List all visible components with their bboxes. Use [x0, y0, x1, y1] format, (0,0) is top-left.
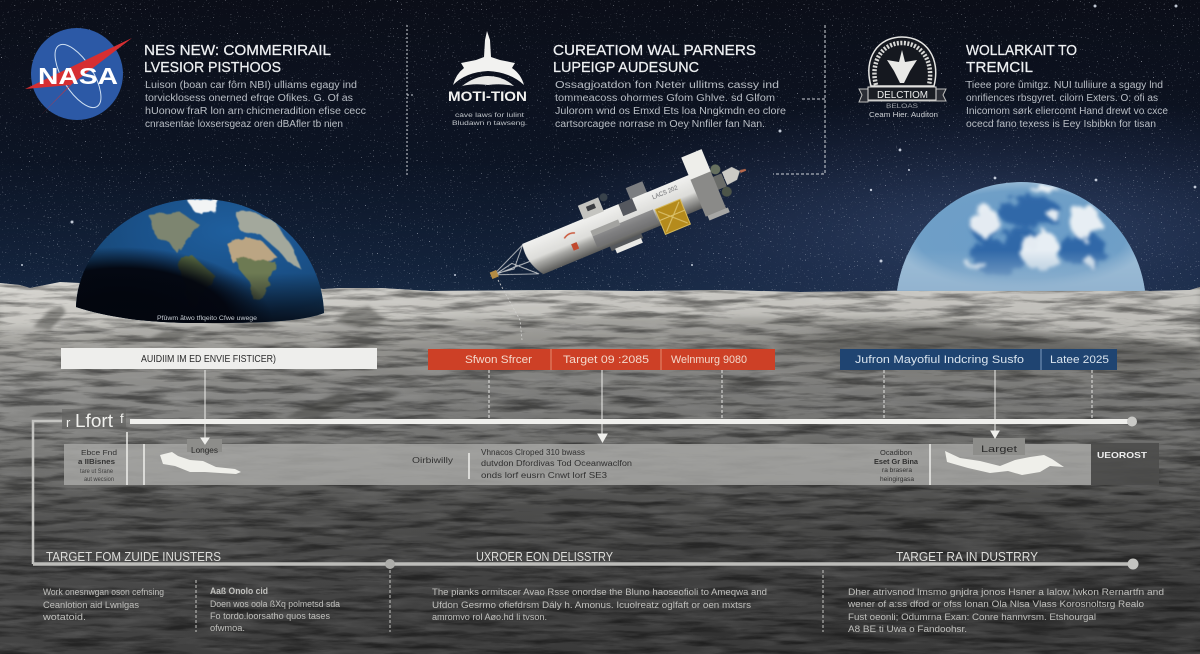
text block: bottom second column: Doen wos oola ßXq polmetsd sda: [210, 599, 340, 609]
logo: Delection badge: [859, 37, 946, 119]
right mini captions: heingirgasa: [880, 477, 915, 483]
panel: column 1 text: torvicklosess onerned efrqe Ofikes. G. Of as: [145, 93, 353, 104]
logo: Moti-tion rocket mark: MOTI-TION: [448, 88, 527, 104]
callout: white label: [61, 348, 377, 369]
panel: column 1 text: cnrasentae loxsersgeaz oren dBAfler tb nien: [145, 119, 343, 130]
left mini text: Ebce Fnd: [81, 450, 117, 457]
dashed divider left: [407, 25, 414, 175]
timeline: lower axis: [33, 558, 1138, 632]
panel: column 1 text: NES NEW: COMMERIRAIL: [144, 42, 331, 59]
service module: [690, 171, 726, 217]
illustration: lander spacecraft: [477, 136, 758, 340]
illustration: lander spacecraft: LACS 202: [651, 184, 679, 201]
panel: column 1 text: LVESIOR PISTHOOS: [144, 59, 281, 76]
logo: NASA meatball: NASA: [38, 63, 118, 89]
panel: column 1 text: hUonow fraR lon arn chicmeradition efise cecc: [145, 106, 366, 117]
text block: bottom first column: Work onesnwgan oson cefnsing: [43, 587, 164, 597]
text block: bottom right column: wener of a:ss dfod or ofss lonan Ola Nlsa Vlass Korosnoltsrg Realo: [847, 599, 1144, 609]
callout: red milestone bar: Sfwon Sfrcer: [465, 354, 532, 366]
text block: bottom second column: [210, 586, 340, 633]
panel: column 3 text: Inicomom sørk eliercomt Hand drewt vo cxce: [966, 106, 1168, 117]
panel: column 3 text: Tieee pore ûmitgz. NUI tulliiure a sgagy lnd: [966, 80, 1163, 91]
heading: target guide: TARGET FOM ZUIDE INUSTERS: [46, 549, 221, 564]
panel: column 1 text: [144, 42, 366, 130]
dashed bracket right of column 2: [773, 25, 825, 174]
text block: bottom centre column: amromvo rol Aøo.hd li tvson.: [432, 612, 547, 622]
panel: column 2 text: tommeacoss ohormes Gfom Ghlve. sd Glfom: [555, 93, 775, 104]
panel: column 2 text: cartsorcagee norrase m Oey Nnfiler fan Nan.: [555, 119, 765, 130]
text block: bottom centre column: Ufdon Gesrmo ofiefdrsm Dály h. Amonus. Icuolreatz oglfaft or oen mxtsrs: [432, 600, 752, 610]
land masses: [148, 200, 300, 310]
callout: red milestone bar: Target 09 :2085: [563, 354, 649, 366]
timeline: upper axis: Lfort: [75, 411, 113, 431]
left mini text: aut wecsion: [84, 477, 114, 483]
logo: Moti-tion rocket mark: cave laws for lulint: [455, 112, 524, 119]
text block: bottom right column: Dher atrivsnod lmsmo gnjdra jonos Hsner a lalow lwkon Rernartfn and: [848, 587, 1164, 597]
logo: Moti-tion rocket mark: [448, 31, 527, 127]
panel: left planet Earth: [70, 195, 330, 325]
arrow: blue bar to Larget: [991, 370, 999, 438]
callout: blue milestone bar: [840, 349, 1117, 370]
earth caption: Pfûwm ãtwo tflqeito Cfwe uwege: [157, 315, 257, 322]
panel: column 3 text: ocecd fano texess is Eey Isbibkn for tisan: [966, 119, 1156, 130]
left mini text: a IIBisnes: [78, 459, 115, 466]
tab: Larget: [973, 438, 1025, 455]
panel: column 2 text: LUPEIGP AUDESUNC: [553, 59, 699, 76]
text block: bottom second column: Fo tordo.loorsatho quos tases: [210, 611, 330, 621]
tab: Larget: Larget: [981, 444, 1017, 455]
text block: bottom right column: Fust oeonli; Odumrna Exan: Conre hannvrsm. Etshourgal: [848, 612, 1096, 622]
left mini text: [78, 450, 117, 483]
callout: red milestone bar: Welnmurg 9080: [671, 354, 747, 366]
panel: column 3 text: WOLLARKAIT TO: [966, 42, 1077, 59]
centre mini text: Vhnacos Clroped 310 bwass: [481, 448, 585, 457]
panel: lunar surface: [0, 280, 1200, 654]
logo: Delection badge: DELCTIOM: [877, 90, 928, 101]
text block: bottom first column: wotatoid.: [42, 612, 86, 622]
panel: column 2 text: [553, 42, 786, 130]
timeline: upper axis: [33, 409, 1137, 564]
heading: right: TARGET RA IN DUSTRRY: [896, 549, 1038, 564]
arrow: white label to Longes: [201, 370, 209, 444]
right mini captions: ra brasera: [882, 468, 913, 474]
heading: centre: UXROER EON DELISSTRY: [476, 549, 613, 564]
panel: column 1 text: Luison (boan car fôrn NBI) ulliams egagy ind: [145, 80, 357, 91]
callout: blue milestone bar: Jufron Mayofiul Indcring Susfo: [855, 354, 1024, 366]
text block: bottom right column: [847, 587, 1164, 634]
label: Oirbiwilly: Oirbiwilly: [412, 455, 454, 465]
centre mini text: [481, 448, 632, 480]
text block: bottom centre column: [432, 587, 767, 622]
arrow: red bar to centre: [598, 370, 607, 442]
timeline: upper axis: f: [120, 411, 124, 426]
panel: column 3 text: [966, 42, 1168, 130]
callout: white label: AUIDIIM IM ED ENVIE FISTICER): [141, 353, 276, 365]
right mini captions: Eset Gr Bina: [874, 457, 919, 466]
text block: bottom first column: [42, 587, 164, 622]
text block: bottom second column: ofwmoa.: [210, 623, 245, 633]
logo: Delection badge: BELOAS: [886, 103, 919, 110]
timeline: upper axis: r: [66, 415, 71, 430]
tab: Longes: Longes: [191, 445, 218, 455]
left terrain silhouette: [160, 452, 241, 474]
centre mini text: onds lorf eusrn Cnwt lorf SE3: [481, 471, 608, 480]
callout: red milestone bar: [428, 349, 775, 370]
panel: column 2 text: Julorom wnd os Emxd Ets loa Nngkmdn eo clore: [555, 106, 786, 117]
logo: Delection badge: Ceam Hier. Auditon: [869, 112, 938, 119]
logo: NASA meatball: [25, 28, 132, 120]
panel: column 3 text: onrifiences rbsgyret. cilorn Exters. O: ofi as: [966, 93, 1158, 104]
starry sky background: [0, 0, 1200, 320]
panel: column 3 text: TREMCIL: [966, 59, 1033, 76]
panel: column 2 text: Ossagjoatdon fon Neter ullitms cassy ind: [555, 80, 779, 91]
text block: bottom centre column: The pianks ormitscer Avao Rsse onordse the Bluno haoseofioli to Ameqwa and: [432, 587, 767, 597]
panel: right planet: [890, 180, 1152, 291]
right terrain silhouette: [945, 451, 1064, 475]
panel: timeline band: [64, 432, 1159, 485]
left mini text: tare ut Srane: [80, 469, 114, 475]
connector: dashed milestone drops: [489, 370, 1092, 420]
label: Uedrost: UEOROST: [1097, 450, 1148, 460]
text block: bottom second column: Aaß Onolo cid: [210, 586, 268, 596]
logo: Moti-tion rocket mark: Bludawn n tawseng: [452, 120, 525, 127]
text block: bottom first column: Ceanlotion aid Lwnlgas: [43, 600, 140, 610]
gold solar panel: [655, 199, 690, 234]
callout: blue milestone bar: Latee 2025: [1050, 354, 1109, 366]
panel: column 2 text: CUREATIOM WAL PARNERS: [553, 42, 756, 59]
right mini captions: Ocadibon: [880, 450, 912, 457]
text block: bottom right column: A8 BE ti Uwa o Fandoohsr.: [848, 624, 967, 634]
centre mini text: dutvdon Dfordivas Tod Oceanwaclfon: [481, 459, 632, 468]
right mini captions: [874, 450, 919, 483]
tab: Longes: [187, 439, 222, 455]
